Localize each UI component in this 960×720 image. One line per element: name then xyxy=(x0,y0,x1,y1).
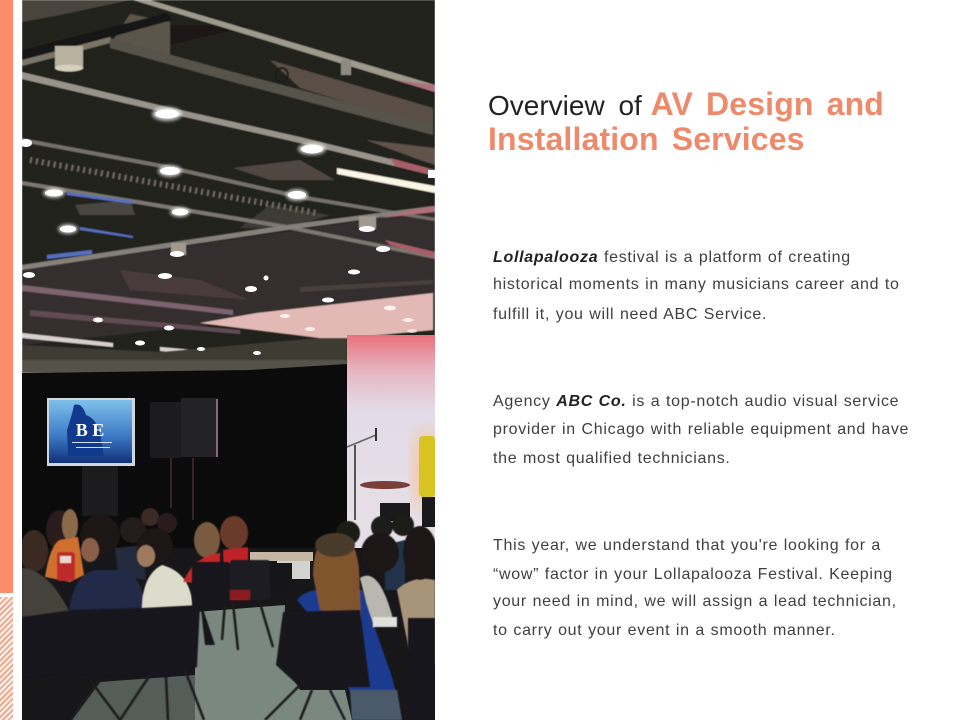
paragraph: Lollapalooza: fulfill it, you will need ABC Service. xyxy=(493,306,767,323)
audience chairs xyxy=(22,560,435,720)
microphone stand and drum kit xyxy=(347,428,435,527)
paragraph: this year xyxy=(493,537,897,639)
paragraph: Lollapalooza xyxy=(493,249,900,323)
hatched accent block xyxy=(0,597,13,720)
paragraph: ABC Co. xyxy=(493,393,909,467)
photo: event venue with seated audience xyxy=(22,0,435,720)
paragraph: this year: to carry out your event in a smooth manner. xyxy=(493,622,836,639)
title: Installation Services xyxy=(488,121,805,157)
ceiling xyxy=(22,0,435,373)
title xyxy=(488,86,884,157)
accent bar xyxy=(0,0,13,593)
floor and table xyxy=(22,548,435,720)
ceiling lights xyxy=(20,107,435,355)
paragraph: this year: your need in mind, we will assign a lead technician, xyxy=(493,593,897,610)
paragraph: this year: This year, we understand that you're looking for a xyxy=(493,537,881,554)
paragraph: ABC Co.: the most qualified technicians. xyxy=(493,450,731,467)
paragraph: this year: “wow” factor in your Lollapalooza Festival. Keeping xyxy=(493,566,893,583)
paragraph: ABC Co.: Agency ABC Co. is a top-notch audio visual service xyxy=(493,393,899,410)
speakers xyxy=(150,398,218,520)
title: Overview of AV Design and xyxy=(488,86,884,122)
seated audience xyxy=(20,508,437,720)
stage wall and black curtain xyxy=(22,335,444,552)
paragraph: ABC Co.: provider in Chicago with reliable equipment and have xyxy=(493,421,909,438)
paragraph: Lollapalooza: historical moments in many musicians career and to xyxy=(493,276,900,293)
TV screen xyxy=(47,398,135,466)
paragraph: Lollapalooza: Lollapalooza festival is a platform of creating xyxy=(493,249,851,266)
TV screen: B E xyxy=(76,420,104,440)
